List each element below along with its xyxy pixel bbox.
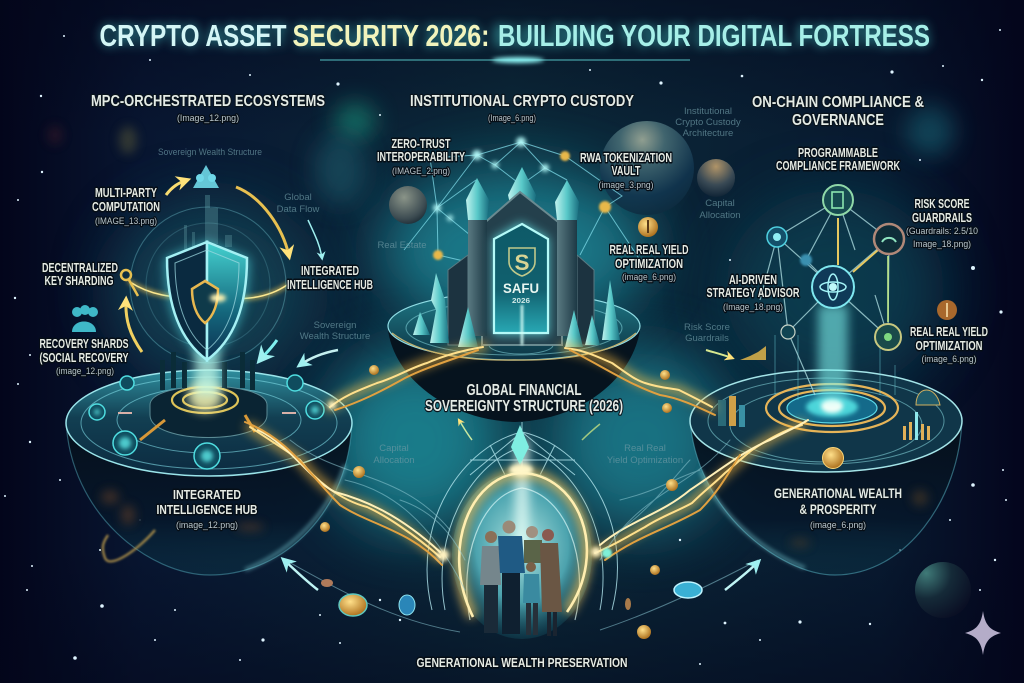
core glow xyxy=(188,380,222,412)
light columns xyxy=(775,335,895,400)
2026 text: 2026 xyxy=(512,296,530,305)
orbit path xyxy=(285,560,758,632)
platform top xyxy=(66,370,352,476)
title part: security 2026: SECURITY 2026: xyxy=(292,18,490,53)
coins along streams xyxy=(320,365,678,575)
label: zero-trust: INTEROPERABILITY xyxy=(377,150,465,164)
gold rings xyxy=(766,384,898,432)
title xyxy=(100,18,930,53)
faint captions: Guardrails xyxy=(685,333,729,344)
blue core xyxy=(787,393,877,423)
figure: man xyxy=(498,520,525,634)
node: document xyxy=(823,185,853,215)
stepped core base xyxy=(150,386,267,438)
faint captions: Allocation xyxy=(373,455,415,466)
right tower xyxy=(557,218,577,336)
figure: woman right xyxy=(540,529,562,636)
shield column base xyxy=(160,352,255,390)
faint captions xyxy=(158,106,741,466)
label: real yield center: OPTIMIZATION xyxy=(615,257,683,271)
node: gold yield medal xyxy=(638,217,658,237)
spire crystal xyxy=(511,425,529,465)
icon: people recovery xyxy=(72,305,98,332)
pillar beam xyxy=(195,345,219,395)
arrow: to sovereign icon xyxy=(166,180,187,195)
faint captions: Institutional xyxy=(684,106,732,117)
right crystal spire xyxy=(555,180,579,220)
label: multi-party computation: (IMAGE_13.png) xyxy=(95,216,157,227)
faint captions: Architecture xyxy=(683,128,733,139)
arrow: risk to bars xyxy=(706,350,732,358)
label: risk score guardrails: GUARDRAILS xyxy=(912,211,972,225)
faint captions: Data Flow xyxy=(277,204,320,215)
figure: older man xyxy=(524,526,542,563)
label: recovery shards: RECOVERY SHARDS xyxy=(40,337,128,351)
family figures xyxy=(480,520,562,636)
inner thin arch xyxy=(467,488,579,620)
node: AI hub xyxy=(812,266,854,308)
island top xyxy=(388,292,640,360)
label: integrated intelligence hub upper: INTEGRATED xyxy=(301,264,359,278)
arrow: cyan flow xyxy=(308,220,322,258)
label: risk score guardrails: RISK SCORE xyxy=(914,197,970,211)
label: zero-trust: (IMAGE_2.png) xyxy=(392,166,450,177)
left bar chart xyxy=(718,396,745,427)
label: integrated intelligence hub lower xyxy=(156,488,258,531)
shield ring energy band glow xyxy=(130,282,287,299)
stream glow xyxy=(250,347,802,557)
junction flares xyxy=(328,401,601,561)
panel: right platform xyxy=(690,346,962,575)
node: risk gauge xyxy=(874,224,904,254)
planet: grey moon xyxy=(389,186,427,224)
pink dashes xyxy=(118,412,296,414)
label: real yield center xyxy=(610,243,688,283)
shield right half xyxy=(207,242,247,360)
energy streams xyxy=(130,282,808,590)
brown debris nebula xyxy=(101,490,264,531)
crystal network lines xyxy=(404,142,640,262)
label: zero-trust xyxy=(377,137,465,177)
node icons on platform xyxy=(89,375,324,469)
label: RWA vault: (image_3.png) xyxy=(598,180,654,191)
label: risk score guardrails: (Guardrails: 2.5/10 xyxy=(906,226,978,237)
teal rings xyxy=(406,301,622,355)
label: programmable compliance xyxy=(776,146,900,173)
SAFU text: SAFU xyxy=(503,280,539,296)
blue coin xyxy=(399,595,415,615)
label: decentralized key sharding: KEY SHARDING xyxy=(44,274,114,288)
figure: woman left xyxy=(480,531,501,633)
right crystals xyxy=(565,280,620,347)
title underline xyxy=(320,57,690,63)
faint captions: Global xyxy=(284,192,312,203)
top flare xyxy=(509,464,533,476)
faint captions: Real Real xyxy=(624,443,666,454)
node: lower right xyxy=(875,324,901,350)
planet: small brown xyxy=(697,159,735,197)
arrow: lower left dome xyxy=(284,560,318,590)
heading: MPC ecosystems: MPC-ORCHESTRATED ECOSYSTEMS xyxy=(91,93,325,110)
mini rising chart xyxy=(740,346,766,360)
arrow: gold arc to hub xyxy=(236,187,289,256)
gold coin planet xyxy=(339,594,367,616)
faint captions: Real Estate xyxy=(377,240,427,251)
network lines xyxy=(760,200,889,395)
label: real yield right: (image_6.png) xyxy=(922,354,976,365)
coin xyxy=(822,448,844,468)
faint captions: Capital xyxy=(379,443,409,454)
label: integrated intelligence hub upper xyxy=(287,264,373,292)
label: risk score guardrails: Image_18.png) xyxy=(913,239,971,250)
node: mid blue xyxy=(800,254,812,266)
arrow: up to key xyxy=(126,300,142,352)
glass hemisphere xyxy=(66,420,352,575)
heading: on-chain compliance: GOVERNANCE xyxy=(792,112,884,129)
inner gold shield xyxy=(192,281,218,323)
portal center beam xyxy=(520,305,524,345)
label: programmable compliance: COMPLIANCE FRAMEWORK xyxy=(776,159,900,173)
glass hemisphere xyxy=(690,418,962,575)
small gold body xyxy=(625,598,631,610)
light beam xyxy=(515,440,529,550)
label: generational wealth prosperity: (image_6.png) xyxy=(810,520,866,531)
label: generational wealth prosperity: GENERATIONAL WEALTH xyxy=(774,486,902,501)
heading: institutional custody: (Image_6.png) xyxy=(488,113,536,124)
blue galaxy disk xyxy=(674,582,702,598)
heading: MPC ecosystems: (Image_12.png) xyxy=(177,113,239,124)
left tower xyxy=(468,218,487,336)
platform rings xyxy=(81,377,337,469)
label: integrated intelligence hub lower: INTEGRATED xyxy=(173,488,241,502)
faint captions: Allocation xyxy=(699,210,741,221)
glowing portal xyxy=(494,224,548,333)
gold links xyxy=(838,218,878,272)
shield ring energy band xyxy=(130,282,287,299)
gold comet arc xyxy=(103,530,155,561)
label: RWA vault xyxy=(580,151,672,191)
heading: on-chain compliance: ON-CHAIN COMPLIANCE & xyxy=(752,94,924,111)
heading: institutional custody xyxy=(410,93,635,124)
icon: key xyxy=(121,270,138,296)
SAFU S logo: S xyxy=(514,250,530,275)
faint captions: Crypto Custody xyxy=(675,117,741,128)
cyan core halo xyxy=(806,397,858,417)
label: generational wealth prosperity: & PROSPERITY xyxy=(800,502,876,517)
island underside xyxy=(388,330,640,422)
label: integrated intelligence hub lower: INTELLIGENCE HUB xyxy=(156,503,258,517)
heading: MPC ecosystems xyxy=(91,93,325,124)
platform top xyxy=(690,370,962,472)
small rotunda xyxy=(916,390,940,405)
panel: left platform xyxy=(66,370,352,575)
label: zero-trust: ZERO-TRUST xyxy=(392,137,451,151)
SAFU S logo xyxy=(509,248,535,276)
small orange planet xyxy=(321,579,333,587)
castle arch stone xyxy=(482,192,562,345)
label: decentralized key sharding xyxy=(42,261,118,288)
thin orbit lines xyxy=(290,440,730,590)
label: multi-party computation xyxy=(92,186,160,227)
center crystal spire xyxy=(508,167,536,222)
castle wings xyxy=(448,255,594,345)
gold arch glow xyxy=(459,473,587,617)
faint captions: Yield Optimization xyxy=(607,455,683,466)
heading: global sovereignty xyxy=(425,382,623,415)
faint captions: Wealth Structure xyxy=(300,331,370,342)
stream: lower left xyxy=(245,422,442,565)
planet: large earth xyxy=(600,121,694,215)
label: recovery shards: (image_12.png) xyxy=(56,366,114,377)
arrow: lower right dome xyxy=(725,562,758,590)
faint captions: Sovereign Wealth Structure xyxy=(158,147,262,158)
gold nodes xyxy=(433,151,611,260)
label: multi-party computation: COMPUTATION xyxy=(92,200,160,214)
icon: sovereign tree xyxy=(193,165,219,188)
planet: dark lower right xyxy=(915,562,971,618)
label: decentralized key sharding: DECENTRALIZED xyxy=(42,261,118,275)
gold ground rings xyxy=(392,333,636,360)
platform rings xyxy=(708,378,944,464)
node: gold yield medal right xyxy=(937,300,957,320)
title part: crypto asset: CRYPTO ASSET xyxy=(100,18,287,53)
label: RWA vault: RWA TOKENIZATION xyxy=(580,151,672,165)
panel: shield group xyxy=(72,165,758,590)
gold arch line xyxy=(459,473,587,617)
left crystals xyxy=(413,273,478,347)
label: integrated intelligence hub upper: INTELLIGENCE HUB xyxy=(287,278,373,292)
lower orbit objects xyxy=(285,560,758,639)
shield inner outline xyxy=(175,250,239,350)
arrow: up to sovereignty label xyxy=(459,420,472,440)
shield left half xyxy=(167,242,207,360)
debris nebula xyxy=(790,490,928,547)
label: recovery shards xyxy=(40,337,129,377)
gold brackets xyxy=(140,415,255,440)
label: AI strategy advisor: AI-DRIVEN xyxy=(729,273,777,287)
arrow: cyan to platform xyxy=(300,350,338,365)
faint captions: Sovereign xyxy=(314,320,356,331)
heading: global sovereignty: SOVEREIGNTY STRUCTURE (2026) xyxy=(425,398,623,415)
family arch xyxy=(427,422,617,639)
node: lower left xyxy=(781,325,795,339)
circular tech rings xyxy=(130,207,286,363)
label: generational wealth prosperity xyxy=(774,486,902,531)
label: real yield right: OPTIMIZATION xyxy=(916,339,982,353)
label: AI strategy advisor xyxy=(706,273,800,313)
node: gear left xyxy=(767,227,787,247)
label: programmable compliance: PROGRAMMABLE xyxy=(798,146,878,160)
label: risk score guardrails xyxy=(906,197,978,250)
teal gem at right junction xyxy=(602,548,612,558)
stream: lower right xyxy=(595,420,808,560)
left crystal spire xyxy=(466,178,489,220)
node icon inner glows xyxy=(94,406,319,462)
figure: child xyxy=(523,562,540,635)
label: AI strategy advisor: (Image_18.png) xyxy=(723,302,783,313)
central beam xyxy=(818,305,848,400)
faint captions: Capital xyxy=(705,198,735,209)
label: real yield center: REAL REAL YIELD xyxy=(610,243,688,257)
label: multi-party computation: MULTI-PARTY xyxy=(95,186,157,200)
stream: upper left xyxy=(330,347,483,410)
gold ring core xyxy=(172,387,238,413)
heading: global sovereignty: GLOBAL FINANCIAL xyxy=(466,382,582,399)
shield glow xyxy=(164,240,250,362)
network nodes xyxy=(433,137,549,221)
label: recovery shards: (SOCIAL RECOVERY xyxy=(40,351,129,365)
label: real yield right: REAL REAL YIELD xyxy=(910,325,988,339)
gold planet right xyxy=(637,625,651,639)
label: RWA vault: VAULT xyxy=(612,164,641,178)
green link xyxy=(887,256,889,322)
heading: generational wealth preservation: GENERATIONAL WEALTH PRESERVATION xyxy=(416,656,628,670)
dome interior glow xyxy=(452,471,592,639)
heading: institutional custody: INSTITUTIONAL CRYPTO CUSTODY xyxy=(410,93,635,110)
heading: on-chain compliance xyxy=(752,94,924,129)
skyline towers xyxy=(184,195,232,250)
hemisphere bright edge xyxy=(245,465,345,570)
stream: upper right xyxy=(565,348,715,415)
arrow: cyan down xyxy=(260,340,277,360)
outer sacred geometry dome xyxy=(427,422,617,610)
arrow: small gold right of label xyxy=(582,424,600,440)
label: integrated intelligence hub lower: (image_12.png) xyxy=(176,520,238,531)
icon: sparkle watermark xyxy=(965,611,1001,655)
white core glow xyxy=(821,399,843,413)
hemisphere bright edge xyxy=(700,470,805,568)
panel: compliance network xyxy=(638,185,957,400)
label: real yield right xyxy=(910,325,988,365)
label: AI strategy advisor: STRATEGY ADVISOR xyxy=(706,286,800,300)
faint captions: Risk Score xyxy=(684,322,730,333)
gold energy flare xyxy=(210,294,226,302)
panel: institutional island xyxy=(388,137,640,422)
right bar chart xyxy=(903,412,930,440)
label: real yield center: (image_6.png) xyxy=(622,272,676,283)
glowing portal halo xyxy=(493,222,549,335)
